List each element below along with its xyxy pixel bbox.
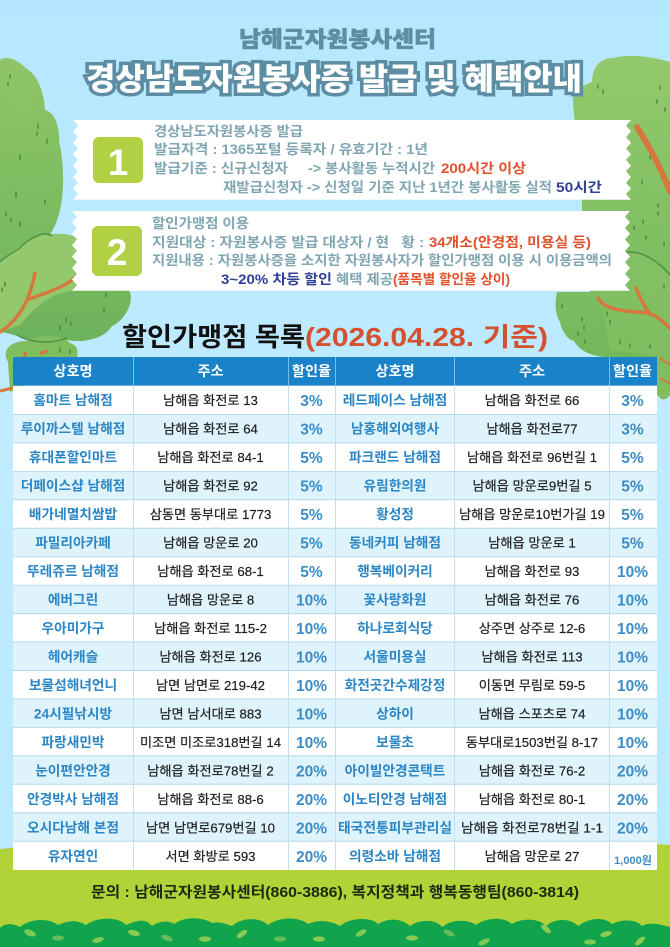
table rows text: 남해읍 망운로 20 <box>163 536 258 550</box>
card 1 text <box>154 124 603 195</box>
table rows text: 행복베이커리 <box>357 564 433 579</box>
table rows text: 남해읍 망운로10번가길 19 <box>459 507 605 522</box>
card 1 text: 재발급신청자 -> 신청일 기준 지난 1년간 봉사활동 실적 <box>223 180 552 195</box>
table rows text: 남면 남면로 219-42 <box>156 678 265 693</box>
table rows text: 미조면 미조로318번길 14 <box>140 735 281 750</box>
table rows text: 서울미용실 <box>364 650 426 664</box>
table rows text: 휴대폰할인마트 <box>29 450 117 465</box>
table rows text: 헤어캐슬 <box>48 650 99 664</box>
table rows text: 더페이스샵 남해점 <box>21 478 125 494</box>
table rows text: 24시필낚시방 <box>34 706 112 722</box>
table rows text: 20% <box>296 792 327 809</box>
table rows text: 남면 남서대로 883 <box>159 706 262 722</box>
table rows text: 눈이편안안경 <box>35 764 111 778</box>
table rows text: 서면 화방로 593 <box>166 849 256 864</box>
table rows text: 5% <box>300 536 323 552</box>
table rows text: 10% <box>617 706 648 724</box>
table rows text: 남해읍 망운로 1 <box>488 536 576 550</box>
section heading <box>122 322 548 352</box>
table rows text: 남해읍 망운로 27 <box>485 849 579 864</box>
panel: card 1 volunteer card issuance <box>73 120 631 200</box>
header subtitle: 남해군자원봉사센터 <box>239 27 436 52</box>
illustration: right tree <box>556 56 670 399</box>
illustration: left tree <box>0 58 131 392</box>
table rows text: 파크랜드 남해점 <box>349 450 441 465</box>
table rows text: 의령소바 남해점 <box>349 849 441 864</box>
table rows text: 20% <box>617 820 648 838</box>
number badge 1 <box>93 137 143 183</box>
table rows text: 남해읍 화전로 64 <box>163 422 258 436</box>
table rows text: 홈마트 남해점 <box>33 393 113 408</box>
table rows text: 황성정 <box>376 507 414 522</box>
table rows text: 3% <box>300 422 323 438</box>
section heading: (2026.04.28. 기준) <box>305 322 548 352</box>
table rows text: 남해읍 망운로9번길 5 <box>472 478 592 494</box>
table rows text: 아이빌안경콘택트 <box>345 764 446 778</box>
table rows text: 꽃사랑화원 <box>364 592 426 608</box>
table rows text: 남해읍 스포츠로 74 <box>479 706 585 722</box>
table rows text: 5% <box>621 450 644 467</box>
table rows text: 남해읍 화전로 13 <box>163 393 258 408</box>
table rows text: 3% <box>621 422 644 438</box>
table rows text: 20% <box>296 849 327 866</box>
table rows text: 이동면 무림로 59-5 <box>479 678 585 693</box>
panel: card 2 discount store usage <box>72 211 630 291</box>
table rows text: 에버그린 <box>48 592 98 608</box>
card 2 text <box>152 216 612 287</box>
card 1 text: -> 봉사활동 누적시간 <box>308 161 436 176</box>
table rows text: 3% <box>621 393 644 410</box>
main title: 경상남도자원봉사증 발급 및 혜택안내 <box>86 62 582 97</box>
table rows text: 뚜레쥬르 남해점 <box>27 564 119 579</box>
table rows text: 3% <box>300 393 323 410</box>
table rows text: 보물섬해녀언니 <box>29 678 117 693</box>
table rows text: 남면 남면로679번길 10 <box>146 820 275 836</box>
card 2 background <box>72 211 630 291</box>
table rows text: 남해읍 화전로 66 <box>485 393 579 408</box>
card 1 text: 200시간 이상 <box>441 161 527 176</box>
table rows text: 남해읍 화전로 115-2 <box>154 621 267 636</box>
table rows text: 상주면 상주로 12-6 <box>479 621 585 636</box>
illustration: bottom bushes <box>0 918 670 947</box>
table rows text: 유자연인 <box>48 849 98 864</box>
card 2 text: 혜택 제공 <box>336 272 393 287</box>
card 1 text: 발급자격 : 1365포털 등록자 / 유효기간 : 1년 <box>154 142 428 157</box>
number badge 1: 1 <box>108 142 128 183</box>
number badge 2 <box>92 226 142 276</box>
table rows text: 남해읍 화전로 76-2 <box>479 764 585 778</box>
table rows text: 10% <box>617 564 648 581</box>
table rows text: 하나로회식당 <box>357 621 433 636</box>
table rows text: 배가네멸치쌈밥 <box>29 507 117 522</box>
table header: 주소 <box>519 364 545 380</box>
table rows text: 파랑새민박 <box>42 735 105 750</box>
table rows text: 20% <box>617 792 648 809</box>
table rows text: 루이까스텔 남해점 <box>21 422 125 436</box>
card 2 text: 3~20% 차등 할인 <box>221 272 332 287</box>
table rows text: 남해읍 화전로 76 <box>485 592 579 608</box>
table rows text: 동네커피 남해점 <box>349 536 441 550</box>
table rows text: 태국전통피부관리실 <box>338 820 452 836</box>
table row backgrounds <box>13 386 657 870</box>
table rows text: 10% <box>296 621 327 638</box>
table rows text: 10% <box>617 650 648 666</box>
table rows text: 남해읍 화전로 68-1 <box>157 564 264 579</box>
footer contact line: 문의 : 남해군자원봉사센터(860-3886), 복지정책과 행복동행팀(860-3814) <box>91 884 579 901</box>
table rows text: 남해읍 화전로78번길 1-1 <box>461 820 603 836</box>
table rows text: 화전곳간수제강정 <box>345 678 445 693</box>
table rows text: 5% <box>300 564 323 581</box>
table rows text: 동부대로1503번길 8-17 <box>466 735 598 750</box>
table: discount store list <box>13 357 657 870</box>
card 2 text: 지원대상 : 자원봉사증 발급 대상자 / 현 황 : <box>152 235 424 250</box>
section heading: 할인가맹점 목록 <box>122 322 305 352</box>
table header: 할인율 <box>613 364 652 380</box>
table rows text: 10% <box>296 592 327 610</box>
table rows text: 20% <box>617 764 648 780</box>
table rows text: 남홍해외여행사 <box>351 420 439 436</box>
table rows text: 우아미가구 <box>42 621 105 636</box>
table rows text: 남해읍 망운로 8 <box>167 592 254 608</box>
card 1 background <box>73 120 631 200</box>
table rows text: 10% <box>617 621 648 638</box>
table rows text <box>21 393 652 867</box>
table rows text: 상하이 <box>376 706 414 722</box>
table rows text: 남해읍 화전로 88-6 <box>157 792 264 807</box>
card 1 text: 발급기준 : 신규신청자 <box>154 161 289 176</box>
table rows text: 파밀리아카페 <box>35 536 111 550</box>
number badge 2: 2 <box>107 232 127 273</box>
table rows text: 1,000원 <box>614 853 652 867</box>
table header: 할인율 <box>292 364 331 380</box>
table rows text: 20% <box>296 820 327 838</box>
card 2 text: 지원내용 : 자원봉사증을 소지한 자원봉사자가 할인가맹점 이용 시 이용금액의 <box>152 253 612 268</box>
table rows text: 10% <box>296 678 327 695</box>
table rows text: 10% <box>296 650 327 666</box>
table rows text: 5% <box>621 536 644 552</box>
table rows text: 남해읍 화전로 126 <box>159 650 262 664</box>
table rows text: 레드페이스 남해점 <box>343 393 447 408</box>
card 2 text: 34개소(안경점, 미용실 등) <box>429 235 591 250</box>
table rows text: 안경박사 남해점 <box>27 792 119 807</box>
table rows text: 남해읍 화전로78번길 2 <box>147 764 274 778</box>
ground: green hill <box>0 839 670 947</box>
table rows text: 5% <box>300 450 323 467</box>
table rows text: 남해읍 화전로 80-1 <box>479 792 585 807</box>
table rows text: 남해읍 화전로 96번길 1 <box>467 450 597 465</box>
table header: 상호명 <box>53 364 93 380</box>
table rows text: 10% <box>617 735 648 752</box>
table rows text: 오시다남해 본점 <box>27 820 119 836</box>
table rows text: 10% <box>296 706 327 724</box>
table rows text: 남해읍 화전로 93 <box>485 564 579 579</box>
card 2 text: (품목별 할인율 상이) <box>393 272 510 287</box>
table rows text: 5% <box>300 507 323 524</box>
card 1 text: 50시간 <box>556 180 603 195</box>
table rows text: 남해읍 화전로 84-1 <box>157 450 264 465</box>
table rows text: 5% <box>621 478 644 496</box>
table rows text: 5% <box>621 507 644 524</box>
table rows text: 이노티안경 남해점 <box>343 792 447 807</box>
table rows text: 20% <box>296 764 327 780</box>
table rows text: 삼동면 동부대로 1773 <box>150 507 271 522</box>
card 1 text: 경상남도자원봉사증 발급 <box>154 124 303 139</box>
table header: 상호명 <box>375 364 415 380</box>
table rows text: 남해읍 화전로 113 <box>481 650 583 664</box>
table rows text: 10% <box>617 592 648 610</box>
table header <box>13 357 657 386</box>
table rows text: 남해읍 화전로 92 <box>163 478 258 494</box>
table rows text: 유림한의원 <box>364 478 426 494</box>
card 2 text: 할인가맹점 이용 <box>152 216 249 231</box>
table rows text: 보물초 <box>376 735 414 750</box>
table rows text: 남해읍 화전로77 <box>486 422 578 436</box>
table rows text: 5% <box>300 478 323 496</box>
table rows text: 10% <box>296 735 327 752</box>
table rows text: 10% <box>617 678 648 695</box>
table header: 주소 <box>197 364 224 380</box>
